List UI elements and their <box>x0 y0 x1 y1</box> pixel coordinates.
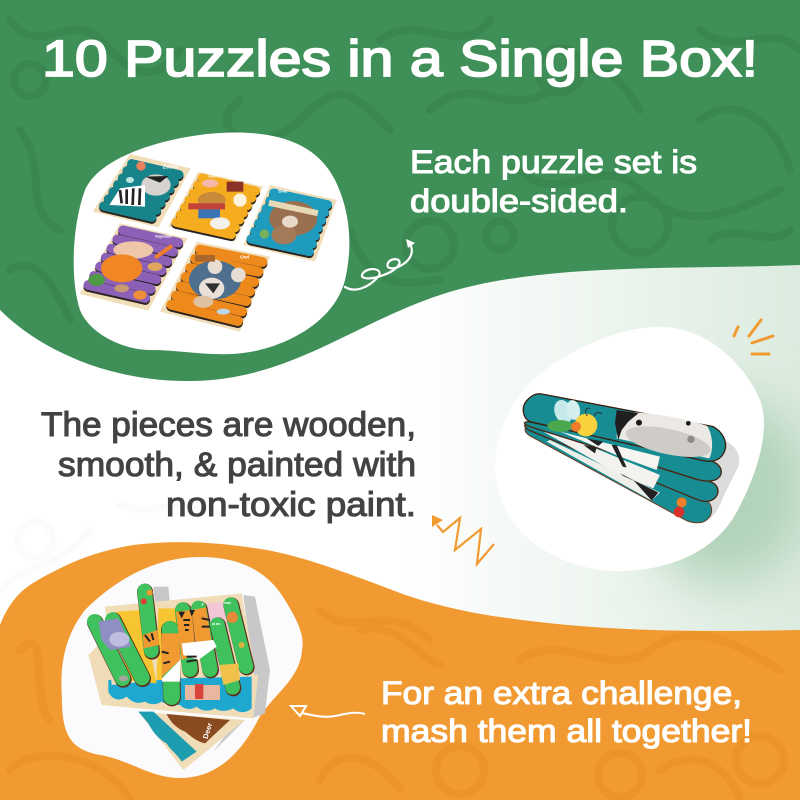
text block: wooden pieces: non-toxic paint. <box>166 486 416 524</box>
title: 10 Puzzles in a Single Box! <box>42 30 758 87</box>
text block: extra challenge <box>381 675 752 749</box>
text block: extra challenge: mash them all together! <box>381 713 752 749</box>
lion and leopard <box>227 612 238 623</box>
text block: wooden pieces: The pieces are wooden, <box>41 406 416 444</box>
green background panel <box>0 0 800 400</box>
hippo <box>98 618 132 650</box>
bee on stick <box>551 397 576 426</box>
tiger <box>176 610 196 660</box>
stick 2 <box>525 422 721 481</box>
shadows <box>153 587 270 752</box>
text block: double-sided: Each puzzle set is <box>410 144 697 180</box>
blue board <box>88 640 258 718</box>
panel: stacked sticks photo <box>495 327 764 571</box>
stick 3 <box>525 423 718 501</box>
puzzle: zebra: Zebra <box>163 164 179 170</box>
stick 4 <box>525 425 712 523</box>
deer board <box>138 712 245 770</box>
panel: five puzzles photo <box>74 133 349 354</box>
white blob backdrop <box>74 133 349 354</box>
puzzle: farm: Farm <box>208 173 219 178</box>
panel: mashed puzzles photo: Deer <box>201 722 214 740</box>
puzzle: bear <box>243 185 337 262</box>
white blob backdrop <box>495 327 764 571</box>
text block: wooden pieces <box>41 406 416 524</box>
puzzle: vegetable <box>80 223 187 311</box>
arrow: curly white <box>345 239 415 290</box>
text block: double-sided: double-sided. <box>410 183 628 219</box>
arrow: white pointing left <box>291 706 365 717</box>
panel: mashed puzzles photo: F <box>202 603 205 607</box>
puzzle: owl <box>160 242 270 332</box>
text block: double-sided <box>410 144 697 219</box>
white blob backdrop <box>61 557 303 778</box>
puzzle: bear: Bear <box>278 189 288 194</box>
top board <box>105 593 255 685</box>
white middle wave panel <box>0 265 800 640</box>
green sticks <box>95 591 247 697</box>
panel: mashed puzzles photo: mal <box>224 601 231 605</box>
arrow: orange zigzag <box>432 515 494 564</box>
puzzle: owl: Owl <box>240 254 250 260</box>
panel: mashed puzzles photo <box>61 557 303 778</box>
text block: wooden pieces: smooth, & painted with <box>58 446 416 484</box>
stick 1 <box>523 394 726 461</box>
panel: mashed puzzles photo: ut an <box>212 622 220 626</box>
puzzle: farm <box>168 172 263 242</box>
orange bottom panel <box>0 542 800 800</box>
zebra face on stick <box>617 413 712 458</box>
decorative rays <box>734 320 773 354</box>
puzzle: zebra <box>93 154 191 227</box>
text block: extra challenge: For an extra challenge, <box>381 675 742 711</box>
stick shadow <box>707 442 739 520</box>
puzzle: vegetable: Vegetable <box>155 234 172 238</box>
